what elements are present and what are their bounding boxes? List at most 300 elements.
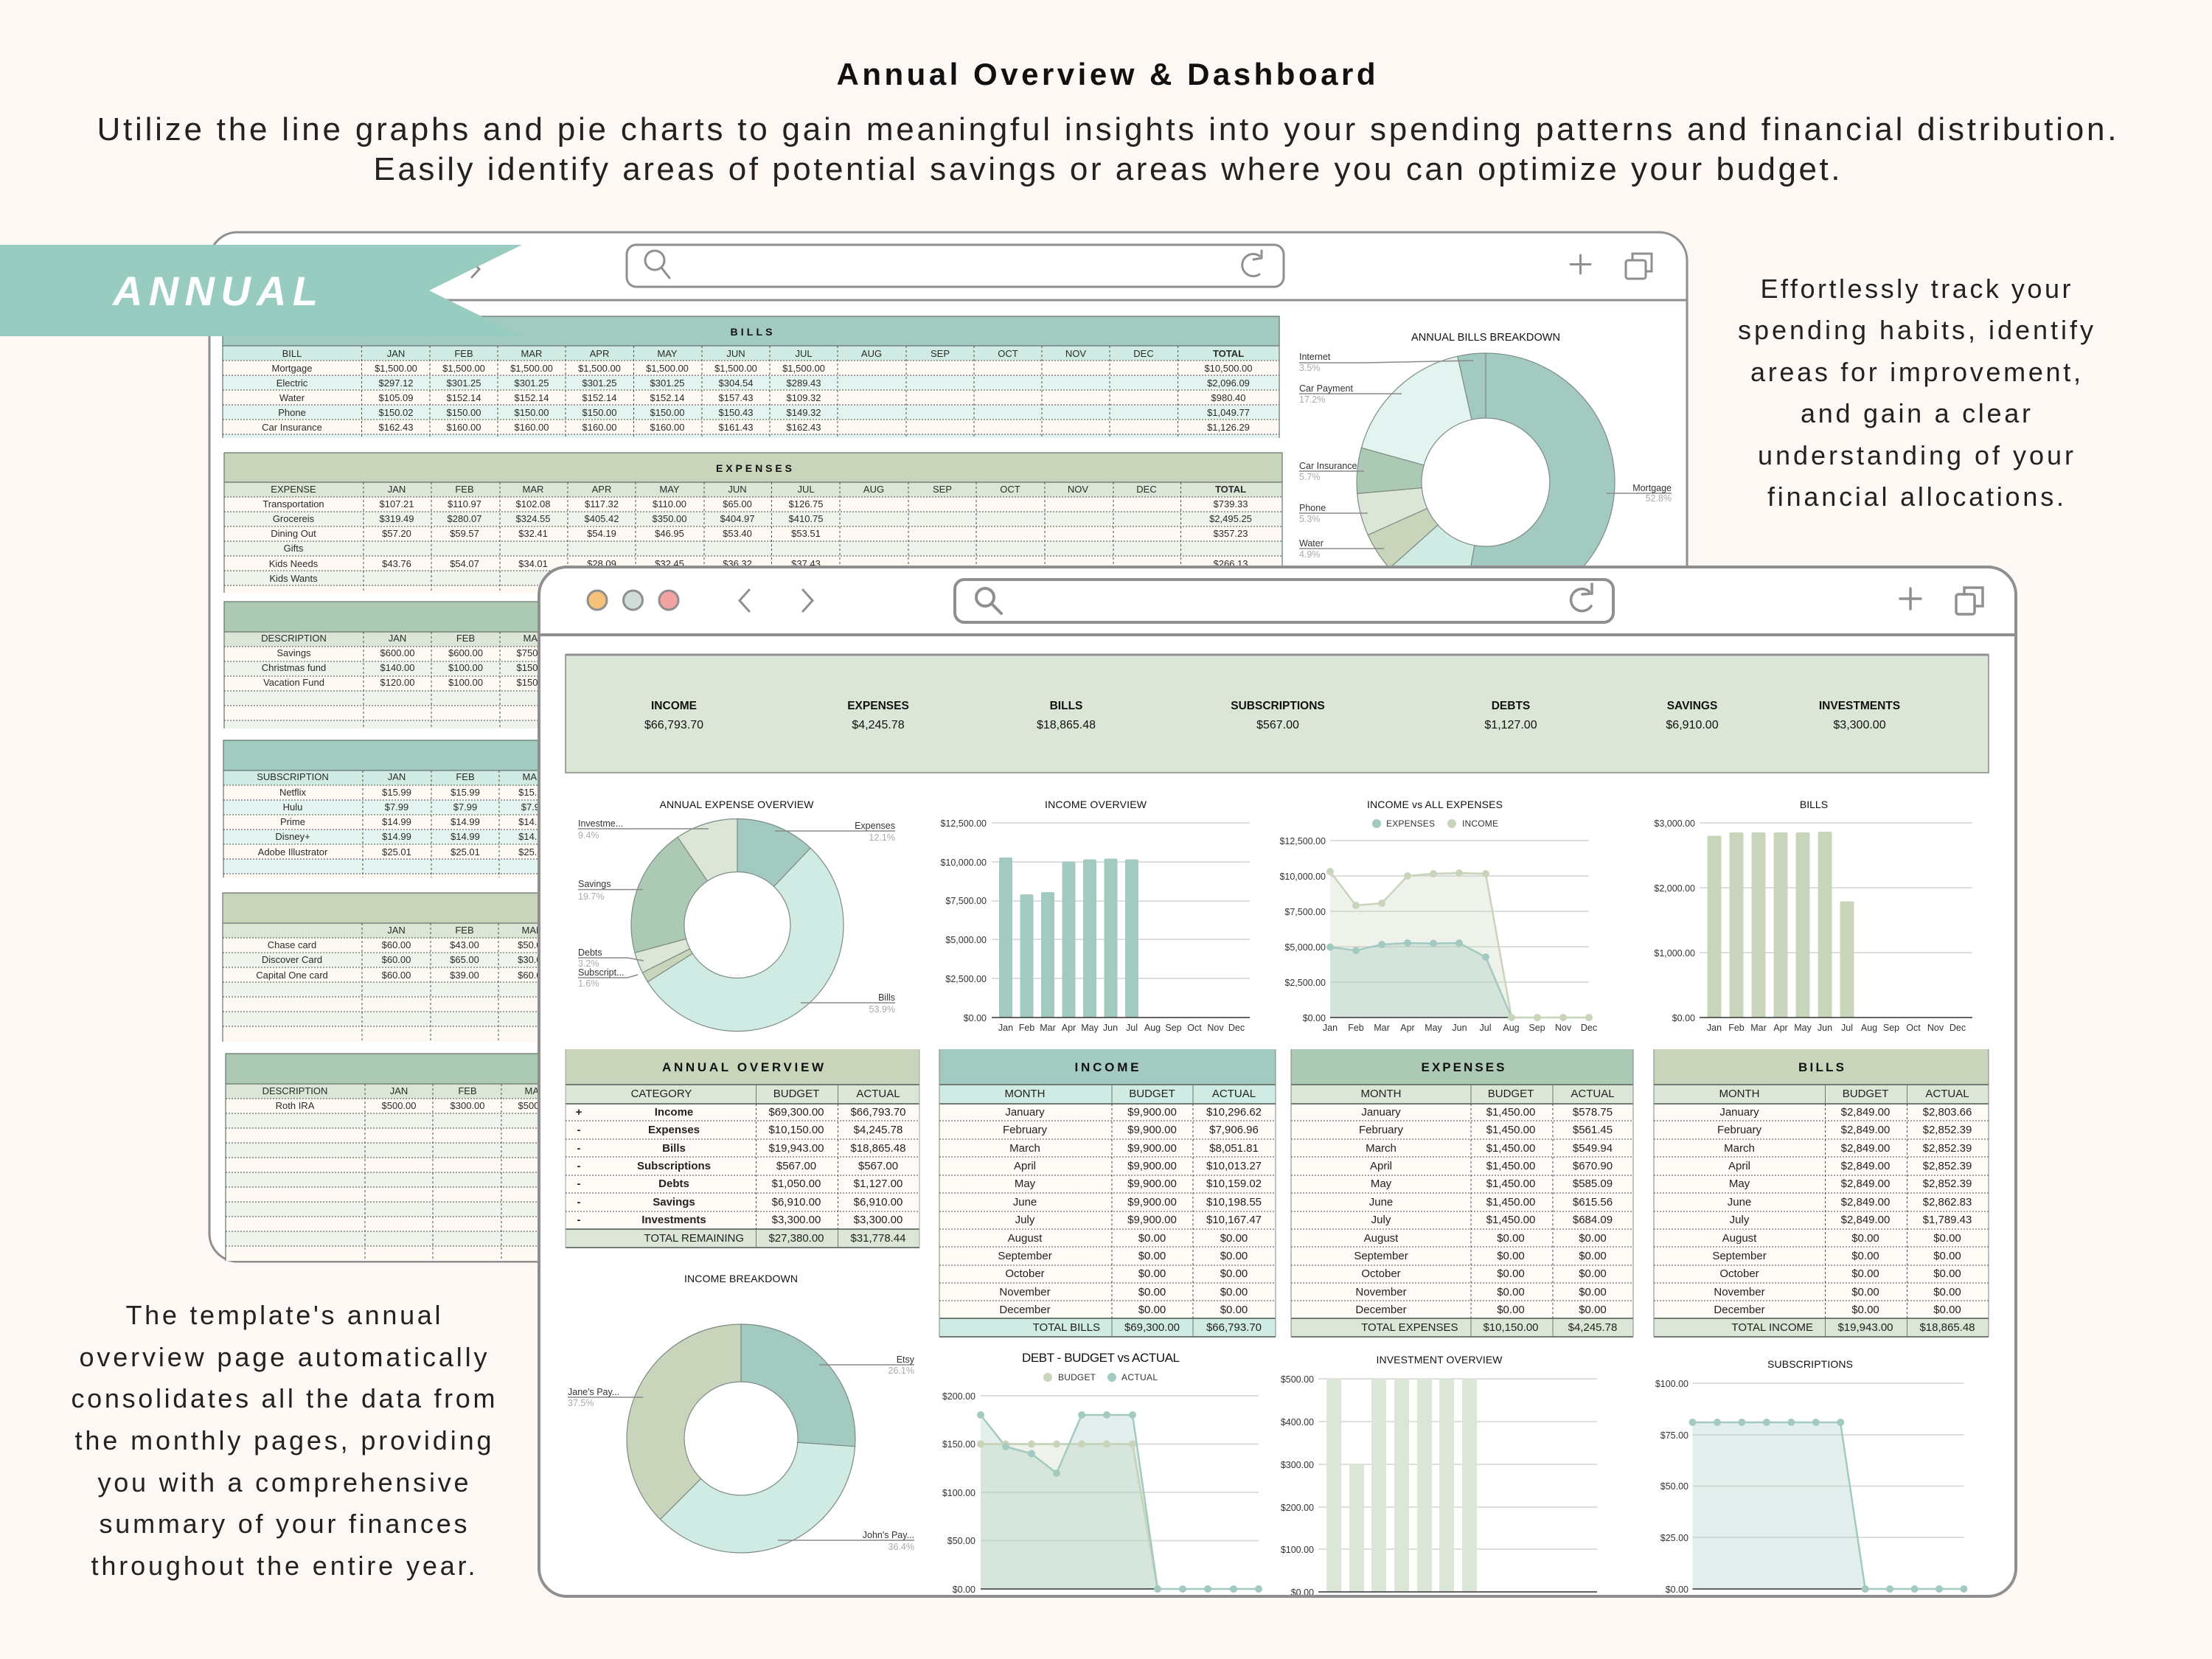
table: expenses: TOTAL bbox=[1215, 484, 1246, 495]
table: income: November bbox=[999, 1286, 1051, 1298]
chart: income vs all expenses area lines: Feb bbox=[1348, 1023, 1364, 1033]
table: annual overview: $31,778.44 bbox=[850, 1232, 906, 1245]
table: debts: $60.00 bbox=[382, 939, 411, 950]
summary strip: $567.00 bbox=[1256, 719, 1299, 731]
table: expenses summary: $0.00 bbox=[1579, 1232, 1607, 1245]
table: expenses: $32.45 bbox=[655, 558, 684, 569]
table: bills: Phone bbox=[278, 407, 306, 418]
table: expenses summary: $0.00 bbox=[1497, 1304, 1525, 1316]
chart: debt budget vs actual: Jul bbox=[1127, 1595, 1138, 1605]
table: subscriptions: $15.99 bbox=[451, 787, 480, 798]
chart: bills bars: Jan bbox=[1707, 1023, 1722, 1033]
table: expenses: $117.32 bbox=[585, 498, 619, 509]
chart: debt budget vs actual: Oct bbox=[1200, 1595, 1215, 1605]
table: bills: $1,500.00 bbox=[714, 363, 757, 374]
table: expenses summary: $0.00 bbox=[1497, 1267, 1525, 1280]
table: savings: $600.00 bbox=[448, 647, 483, 658]
table: expenses summary: $684.09 bbox=[1573, 1214, 1613, 1226]
table: expenses summary: April bbox=[1370, 1160, 1392, 1172]
table: bills summary: $0.00 bbox=[1851, 1232, 1879, 1245]
chart: income vs all expenses area lines: $12,500.00 bbox=[1279, 836, 1326, 846]
table: savings: $100.00 bbox=[448, 677, 483, 688]
table: expenses summary: November bbox=[1355, 1286, 1407, 1298]
table: subscriptions: $7.99 bbox=[453, 801, 477, 813]
table: income: May bbox=[1015, 1178, 1036, 1190]
table: bills summary: $18,865.48 bbox=[1919, 1321, 1975, 1334]
table: expenses summary: $1,450.00 bbox=[1486, 1142, 1535, 1155]
table: investments: $500.00 bbox=[382, 1100, 416, 1111]
table: expenses summary: EXPENSES bbox=[1422, 1060, 1504, 1074]
summary strip: DEBTS bbox=[1492, 700, 1530, 712]
chart: bills bars bbox=[1654, 799, 1972, 1033]
chart: bills bars: Apr bbox=[1773, 1023, 1788, 1033]
text block: right description bbox=[1738, 274, 2093, 512]
chart: annual expense overview donut: Expenses bbox=[855, 821, 895, 831]
table: investments: FEB bbox=[458, 1085, 477, 1096]
chart: debt budget vs actual: May bbox=[1073, 1595, 1091, 1605]
table: bills summary: $2,803.66 bbox=[1923, 1106, 1972, 1119]
table: investments: MAR bbox=[525, 1085, 546, 1096]
table: expenses: $324.55 bbox=[516, 513, 550, 524]
chart: annual expense overview donut: Bills bbox=[878, 992, 895, 1003]
chart: income overview bars: Aug bbox=[1144, 1023, 1161, 1033]
chart: subscriptions area line: $50.00 bbox=[1660, 1481, 1688, 1492]
table: expenses: $28.09 bbox=[587, 558, 616, 569]
table: expenses summary: $1,450.00 bbox=[1486, 1196, 1535, 1208]
chart: annual expense overview donut: Subscript... bbox=[578, 967, 625, 978]
table: subscriptions: MAR bbox=[523, 771, 543, 782]
table: bills: $1,500.00 bbox=[442, 363, 485, 374]
table: income: September bbox=[998, 1250, 1052, 1262]
table: bills: $160.00 bbox=[650, 422, 684, 433]
chart: annual bills breakdown donut: 5.7% bbox=[1299, 472, 1320, 482]
table: expenses: Grocereis bbox=[273, 513, 315, 524]
chart: debt budget vs actual: $0.00 bbox=[953, 1585, 975, 1595]
table: debts: FEB bbox=[455, 925, 474, 936]
chart: income overview bars: Jul bbox=[1126, 1023, 1138, 1033]
table: income: TOTAL BILLS bbox=[1033, 1321, 1100, 1334]
chart: bills bars: Nov bbox=[1927, 1023, 1944, 1033]
summary strip bbox=[566, 655, 1989, 773]
chart: income vs all expenses area lines: Jun bbox=[1452, 1023, 1467, 1033]
text block: left description: overview page automatically bbox=[80, 1342, 487, 1372]
chart: income overview bars: INCOME OVERVIEW bbox=[1045, 799, 1147, 810]
table: debts: $30.00 bbox=[518, 954, 547, 965]
chart: annual expense overview donut: 19.7% bbox=[578, 891, 604, 902]
table: expenses: $2,495.25 bbox=[1209, 513, 1252, 524]
table: income: $7,906.96 bbox=[1209, 1124, 1259, 1136]
chart: income vs all expenses area lines bbox=[1279, 799, 1597, 1033]
table: expenses: EXPENSE bbox=[271, 484, 316, 495]
table: subscriptions: $25.01 bbox=[382, 846, 411, 858]
chart: income vs all expenses area lines: Mar bbox=[1374, 1023, 1390, 1033]
table: income: MONTH bbox=[1004, 1088, 1046, 1100]
table: annual overview: $18,865.48 bbox=[850, 1142, 906, 1155]
table: savings: Savings bbox=[276, 647, 311, 658]
table: annual overview bbox=[566, 1049, 919, 1248]
chart: income vs all expenses area lines: Jul bbox=[1480, 1023, 1491, 1033]
table: bills summary: August bbox=[1722, 1232, 1757, 1245]
table: expenses: EXPENSES bbox=[716, 462, 792, 474]
chart: annual expense overview donut: 53.9% bbox=[869, 1004, 895, 1015]
table: expenses summary: $670.90 bbox=[1573, 1160, 1613, 1172]
table: annual overview: + bbox=[576, 1106, 582, 1119]
table: savings: $140.00 bbox=[380, 662, 414, 673]
table: expenses: $53.40 bbox=[723, 528, 752, 539]
table: expenses: $405.42 bbox=[584, 513, 619, 524]
table: bills: $160.00 bbox=[582, 422, 616, 433]
table: subscriptions: $14.99 bbox=[518, 831, 548, 842]
table: bills summary: May bbox=[1729, 1178, 1750, 1190]
table: bills: $301.25 bbox=[447, 378, 481, 389]
text block: right description: Effortlessly track your bbox=[1761, 274, 2070, 304]
table: expenses: $357.23 bbox=[1214, 528, 1248, 539]
text block: right description: spending habits, identify bbox=[1738, 315, 2093, 345]
table: bills: AUG bbox=[861, 348, 882, 359]
table: expenses summary: MONTH bbox=[1361, 1088, 1401, 1100]
table: expenses summary: $615.56 bbox=[1573, 1196, 1613, 1208]
chart: income vs all expenses area lines: Aug bbox=[1503, 1023, 1520, 1033]
text block: left description: you with a comprehensive bbox=[97, 1467, 469, 1498]
table: bills summary: BILLS bbox=[1798, 1060, 1844, 1074]
table: annual overview: Subscriptions bbox=[637, 1160, 711, 1172]
chart: investment overview bars: $500.00 bbox=[1281, 1374, 1314, 1385]
table: subscriptions: $7.99 bbox=[385, 801, 408, 813]
search bar bbox=[955, 580, 1613, 622]
table: bills summary: March bbox=[1724, 1142, 1755, 1155]
chart: annual bills breakdown donut: 3.5% bbox=[1299, 363, 1320, 373]
table: expenses: Gifts bbox=[284, 543, 304, 554]
table: expenses: AUG bbox=[863, 484, 884, 495]
chart: annual expense overview donut: 12.1% bbox=[869, 832, 895, 843]
table: expenses: $266.13 bbox=[1214, 558, 1248, 569]
chart: bills bars: $3,000.00 bbox=[1654, 818, 1695, 829]
table: bills summary: $2,849.00 bbox=[1841, 1106, 1890, 1119]
table: expenses summary: $1,450.00 bbox=[1486, 1124, 1535, 1136]
text block: right description: and gain a clear bbox=[1801, 398, 2031, 428]
text block: left description: The template's annual bbox=[125, 1300, 441, 1330]
table: annual overview: - bbox=[577, 1160, 581, 1172]
chart: investment overview bars: INVESTMENT OVERVIEW bbox=[1376, 1354, 1503, 1366]
chart: annual bills breakdown donut: 4.9% bbox=[1299, 549, 1320, 560]
chart: bills bars: Aug bbox=[1861, 1023, 1877, 1033]
chart: debt budget vs actual: Nov bbox=[1225, 1595, 1242, 1605]
table: debts: $65.00 bbox=[450, 954, 479, 965]
chart: income vs all expenses area lines: Sep bbox=[1528, 1023, 1545, 1033]
table: income: April bbox=[1014, 1160, 1036, 1172]
table: subscriptions: JAN bbox=[388, 771, 406, 782]
chart: income overview bars: $12,500.00 bbox=[940, 818, 987, 829]
table: income: $9,900.00 bbox=[1127, 1214, 1177, 1226]
chart: subscriptions area line: Mar bbox=[1734, 1595, 1750, 1605]
table: income: $10,198.55 bbox=[1206, 1196, 1262, 1208]
table: annual overview: $6,910.00 bbox=[854, 1196, 902, 1208]
table: annual overview: TOTAL REMAINING bbox=[644, 1232, 744, 1245]
table: bills: $2,096.09 bbox=[1207, 378, 1250, 389]
table: investments: $300.00 bbox=[450, 1100, 485, 1111]
table: expenses: $43.76 bbox=[382, 558, 411, 569]
table: expenses summary: $1,450.00 bbox=[1486, 1178, 1535, 1190]
table: bills: $162.43 bbox=[786, 422, 821, 433]
table: income: $0.00 bbox=[1220, 1304, 1248, 1316]
table: expenses summary: September bbox=[1354, 1250, 1408, 1262]
chart: subscriptions area line: $25.00 bbox=[1660, 1533, 1688, 1543]
table: debts: Capital One card bbox=[256, 970, 328, 981]
table: income: $9,900.00 bbox=[1127, 1196, 1177, 1208]
table: income: $10,167.47 bbox=[1206, 1214, 1262, 1226]
chart: debt budget vs actual: $150.00 bbox=[942, 1439, 975, 1450]
table: annual overview: - bbox=[577, 1124, 581, 1136]
chart: bills bars: Mar bbox=[1750, 1023, 1767, 1033]
table: bills summary: April bbox=[1728, 1160, 1750, 1172]
table: bills summary: October bbox=[1719, 1267, 1759, 1280]
table: annual overview: Savings bbox=[653, 1196, 695, 1208]
chart: bills bars: Jul bbox=[1841, 1023, 1853, 1033]
chart: subscriptions area line: Nov bbox=[1931, 1595, 1948, 1605]
chart: bills bars: Oct bbox=[1906, 1023, 1921, 1033]
icon: plus bbox=[1900, 588, 1921, 609]
table: income: $9,900.00 bbox=[1127, 1142, 1177, 1155]
table: expenses: $404.97 bbox=[720, 513, 755, 524]
chart: annual expense overview donut: ANNUAL EXPENSE OVERVIEW bbox=[659, 799, 814, 810]
table: expenses: $739.33 bbox=[1214, 498, 1248, 509]
back window search bar bbox=[627, 245, 1284, 287]
table: expenses: $59.57 bbox=[450, 528, 479, 539]
table: bills summary: $2,849.00 bbox=[1841, 1178, 1890, 1190]
table: income: January bbox=[1005, 1106, 1045, 1119]
table: bills: $150.43 bbox=[718, 407, 754, 418]
chart: income breakdown donut: Etsy bbox=[897, 1354, 915, 1365]
icon: copy bbox=[1956, 588, 1983, 614]
table: expenses summary: July bbox=[1371, 1214, 1391, 1226]
table: bills summary: $2,849.00 bbox=[1841, 1214, 1890, 1226]
table: expenses summary: $1,450.00 bbox=[1486, 1160, 1535, 1172]
table: bills summary: February bbox=[1717, 1124, 1762, 1136]
icon: back window copy bbox=[1626, 254, 1652, 279]
table: bills summary: $0.00 bbox=[1851, 1286, 1879, 1298]
table: income: $0.00 bbox=[1138, 1250, 1166, 1262]
table: subscriptions: SUBSCRIPTION bbox=[257, 771, 329, 782]
table: annual overview: - bbox=[577, 1214, 581, 1226]
chart: subscriptions area line: Jun bbox=[1809, 1595, 1823, 1605]
icon: traffic light dots bbox=[588, 591, 678, 610]
table: bills: $162.43 bbox=[379, 422, 413, 433]
table: bills: $1,500.00 bbox=[646, 363, 689, 374]
chart: subscriptions area line: Sep bbox=[1882, 1595, 1898, 1605]
chart: investment overview bars: $400.00 bbox=[1281, 1417, 1314, 1427]
table: expenses: $110.97 bbox=[448, 498, 481, 509]
table: bills summary: TOTAL INCOME bbox=[1731, 1321, 1813, 1334]
table: bills summary: $2,852.39 bbox=[1923, 1178, 1972, 1190]
chart: bills bars: $1,000.00 bbox=[1654, 948, 1695, 959]
table: income: $0.00 bbox=[1138, 1304, 1166, 1316]
table: annual overview: CATEGORY bbox=[631, 1088, 692, 1100]
table: bills: BILL bbox=[282, 348, 302, 359]
table: bills: TOTAL bbox=[1213, 348, 1244, 359]
table: bills: $301.25 bbox=[650, 378, 684, 389]
chart: annual bills breakdown donut: Internet bbox=[1299, 352, 1331, 362]
table: expenses summary: January bbox=[1361, 1106, 1401, 1119]
chart: debt budget vs actual: $100.00 bbox=[942, 1488, 975, 1498]
table: subscriptions: FEB bbox=[456, 771, 475, 782]
table: subscriptions: $14.99 bbox=[451, 831, 480, 842]
table: income: $0.00 bbox=[1220, 1267, 1248, 1280]
table: debts bbox=[223, 893, 547, 1042]
table: savings: $600.00 bbox=[380, 647, 414, 658]
table: bills: SEP bbox=[931, 348, 950, 359]
table: expenses summary: March bbox=[1366, 1142, 1397, 1155]
chart: investment overview bars: $200.00 bbox=[1281, 1503, 1314, 1513]
table: expenses: $319.49 bbox=[379, 513, 414, 524]
table: expenses: Dining Out bbox=[271, 528, 316, 539]
table: bills summary: $0.00 bbox=[1933, 1286, 1961, 1298]
table: debts: $60.00 bbox=[382, 954, 411, 965]
table: bills: Water bbox=[279, 392, 305, 403]
chart: annual bills breakdown donut: Mortgage bbox=[1632, 483, 1672, 493]
table: savings: MAR bbox=[524, 633, 544, 644]
summary strip: SUBSCRIPTIONS bbox=[1231, 700, 1325, 712]
chart: income overview bars: $5,000.00 bbox=[945, 935, 987, 945]
table: income: October bbox=[1005, 1267, 1045, 1280]
table: expenses summary: December bbox=[1355, 1304, 1407, 1316]
chart: bills bars: Sep bbox=[1883, 1023, 1899, 1033]
table: bills summary: $2,849.00 bbox=[1841, 1160, 1890, 1172]
icon: back window reload bbox=[1242, 251, 1262, 276]
chart: subscriptions area line: $75.00 bbox=[1660, 1430, 1688, 1441]
table: annual overview: $3,300.00 bbox=[854, 1214, 902, 1226]
table: bills: $109.32 bbox=[786, 392, 821, 403]
table: income: August bbox=[1008, 1232, 1043, 1245]
table: expenses summary: February bbox=[1359, 1124, 1404, 1136]
table: expenses: $110.00 bbox=[653, 498, 686, 509]
chart: investment overview bars: $100.00 bbox=[1281, 1545, 1314, 1555]
table: income: $0.00 bbox=[1138, 1267, 1166, 1280]
table: savings: Vacation Fund bbox=[263, 677, 324, 688]
table: savings: FEB bbox=[456, 633, 475, 644]
summary strip: $6,910.00 bbox=[1666, 719, 1719, 731]
table: annual overview: $19,943.00 bbox=[768, 1142, 824, 1155]
table: debts: Discover Card bbox=[262, 954, 322, 965]
icon: navigation chevrons bbox=[740, 590, 813, 611]
table: expenses: SEP bbox=[933, 484, 952, 495]
chart: income overview bars: Jun bbox=[1103, 1023, 1118, 1033]
table: income: $9,900.00 bbox=[1127, 1160, 1177, 1172]
table: expenses: $54.19 bbox=[587, 528, 616, 539]
table: debts: Chase card bbox=[268, 939, 316, 950]
chart: bills bars: $0.00 bbox=[1672, 1013, 1695, 1023]
table: debts: $60.00 bbox=[382, 970, 411, 981]
table: annual overview: $66,793.70 bbox=[850, 1106, 906, 1119]
table: bills summary: $0.00 bbox=[1933, 1232, 1961, 1245]
icon: magnifier bbox=[976, 588, 1001, 613]
table: expenses summary: $585.09 bbox=[1573, 1178, 1613, 1190]
table: bills: $150.00 bbox=[447, 407, 481, 418]
table: bills: $301.25 bbox=[515, 378, 549, 389]
table: annual overview: $1,050.00 bbox=[772, 1178, 821, 1190]
table: bills summary: September bbox=[1712, 1250, 1767, 1262]
table: bills: $150.00 bbox=[582, 407, 616, 418]
table: bills: $289.43 bbox=[786, 378, 821, 389]
chart: annual bills breakdown donut bbox=[1299, 332, 1672, 611]
table: expenses summary: $0.00 bbox=[1497, 1286, 1525, 1298]
chart: investment overview bars bbox=[1281, 1354, 1597, 1598]
table: bills summary: $0.00 bbox=[1933, 1250, 1961, 1262]
table: expenses summary: $10,150.00 bbox=[1483, 1321, 1539, 1334]
table: expenses summary: $1,450.00 bbox=[1486, 1106, 1535, 1119]
table: investments: $500.00 bbox=[518, 1100, 553, 1111]
summary strip: $66,793.70 bbox=[644, 719, 703, 731]
chart: income breakdown donut: 36.4% bbox=[888, 1542, 914, 1552]
chart: income overview bars: Jan bbox=[998, 1023, 1013, 1033]
table: expenses: $37.43 bbox=[791, 558, 821, 569]
table: bills: BILLS bbox=[730, 326, 773, 338]
table: savings: $120.00 bbox=[380, 677, 414, 688]
icon: reload bbox=[1571, 584, 1592, 611]
chart: debt budget vs actual: Sep bbox=[1175, 1595, 1191, 1605]
subtitle bbox=[97, 111, 2116, 187]
chart: debt budget vs actual: $200.00 bbox=[942, 1391, 975, 1402]
chart: subscriptions area line bbox=[1655, 1358, 1972, 1605]
table: subscriptions: Disney+ bbox=[275, 831, 310, 842]
chart: debt budget vs actual: ACTUAL bbox=[1121, 1372, 1158, 1382]
table: subscriptions: $14.99 bbox=[382, 831, 411, 842]
text block: left description: consolidates all the data from bbox=[71, 1383, 495, 1413]
table: bills: $150.02 bbox=[379, 407, 413, 418]
chart: bills bars: BILLS bbox=[1800, 799, 1828, 810]
table: bills: Mortgage bbox=[272, 363, 312, 374]
table: expenses: Kids Wants bbox=[269, 573, 318, 584]
chart: debt budget vs actual: Jun bbox=[1099, 1595, 1114, 1605]
panel: back browser window with annual sheet bbox=[209, 232, 1687, 1262]
table: bills: $980.40 bbox=[1211, 392, 1246, 403]
table: subscriptions: Prime bbox=[280, 816, 305, 827]
chart: debt budget vs actual: Jan bbox=[973, 1595, 988, 1605]
table: subscriptions: Hulu bbox=[283, 801, 302, 813]
chart: annual bills breakdown donut: Phone bbox=[1299, 503, 1326, 513]
chart: income vs all expenses area lines: Dec bbox=[1581, 1023, 1597, 1033]
table: income: $9,900.00 bbox=[1127, 1124, 1177, 1136]
table: income: $66,793.70 bbox=[1206, 1321, 1262, 1334]
table: bills: $161.43 bbox=[718, 422, 754, 433]
table: expenses: $54.07 bbox=[450, 558, 479, 569]
table: income: March bbox=[1009, 1142, 1040, 1155]
table: bills: $152.14 bbox=[515, 392, 549, 403]
chart: annual expense overview donut: Debts bbox=[578, 947, 602, 958]
table: income: June bbox=[1013, 1196, 1037, 1208]
table: subscriptions: Adobe Illustrator bbox=[258, 846, 328, 858]
table: bills: FEB bbox=[454, 348, 473, 359]
table: bills: $152.14 bbox=[582, 392, 616, 403]
table: expenses: JUN bbox=[728, 484, 747, 495]
table: income: February bbox=[1003, 1124, 1048, 1136]
table: annual overview: Investments bbox=[641, 1214, 706, 1226]
chart: annual bills breakdown donut: 17.2% bbox=[1299, 394, 1325, 405]
table: savings: $100.00 bbox=[448, 662, 483, 673]
table: bills: JUN bbox=[726, 348, 745, 359]
table: investments: JAN bbox=[390, 1085, 408, 1096]
table: bills: $1,126.29 bbox=[1207, 422, 1250, 433]
table: bills: APR bbox=[590, 348, 609, 359]
table: savings: $750.00 bbox=[516, 647, 552, 658]
table: expenses: $410.75 bbox=[789, 513, 823, 524]
table: bills summary: MONTH bbox=[1719, 1088, 1759, 1100]
table: bills summary: $0.00 bbox=[1851, 1304, 1879, 1316]
table: savings: Christmas fund bbox=[262, 662, 326, 673]
table: expenses bbox=[224, 453, 1282, 593]
table: bills: $1,500.00 bbox=[375, 363, 417, 374]
table: expenses summary: August bbox=[1364, 1232, 1399, 1245]
chart: investment overview bars: $300.00 bbox=[1281, 1460, 1314, 1470]
